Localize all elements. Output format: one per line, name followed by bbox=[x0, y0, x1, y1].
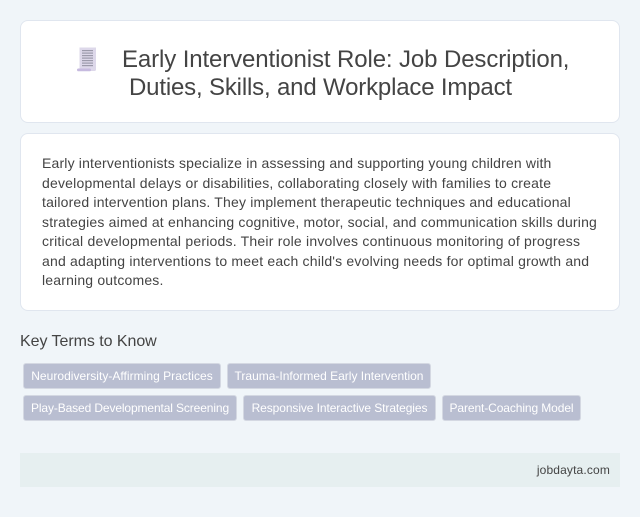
footer text: jobdayta.com bbox=[537, 463, 610, 477]
tag: Responsive Interactive Strategies bbox=[252, 401, 427, 415]
tag bbox=[23, 395, 237, 421]
tag: Parent-Coaching Model bbox=[450, 401, 573, 415]
tag bbox=[23, 363, 221, 389]
text block: description: strategies aimed at enhancing cognitive, motor, social, and communication skills during bbox=[42, 214, 597, 230]
tag bbox=[227, 363, 431, 389]
icon: document scroll bbox=[77, 48, 96, 72]
tag bbox=[442, 395, 581, 421]
text block: description: developmental delays or disabilities, collaborating closely with families to create bbox=[42, 175, 551, 191]
tag: Play-Based Developmental Screening bbox=[31, 401, 229, 415]
heading: key terms: Key Terms to Know bbox=[20, 333, 157, 350]
text block: description: critical developmental periods. Their role involves continuous monitoring of progress bbox=[42, 233, 580, 249]
text block: description: learning outcomes. bbox=[42, 272, 164, 288]
panel: description card bbox=[20, 133, 620, 311]
panel: title card bbox=[20, 20, 620, 123]
text block: description: tailored intervention plans. They implement therapeutic techniques and educational bbox=[42, 194, 571, 210]
tag: Neurodiversity-Affirming Practices bbox=[31, 369, 213, 383]
footer bar bbox=[20, 453, 620, 487]
tag bbox=[243, 395, 436, 421]
text block: description bbox=[42, 155, 597, 288]
tag list: key terms bbox=[23, 363, 581, 421]
title bbox=[122, 46, 569, 101]
title: Duties, Skills, and Workplace Impact bbox=[129, 74, 512, 101]
text block: description: Early interventionists specialize in assessing and supporting young children with bbox=[42, 155, 552, 171]
text block: description: and adapting interventions to meet each child's evolving needs for optimal growth and bbox=[42, 253, 589, 269]
tag: Trauma-Informed Early Intervention bbox=[235, 369, 423, 383]
title: Early Interventionist Role: Job Description, bbox=[122, 46, 569, 73]
